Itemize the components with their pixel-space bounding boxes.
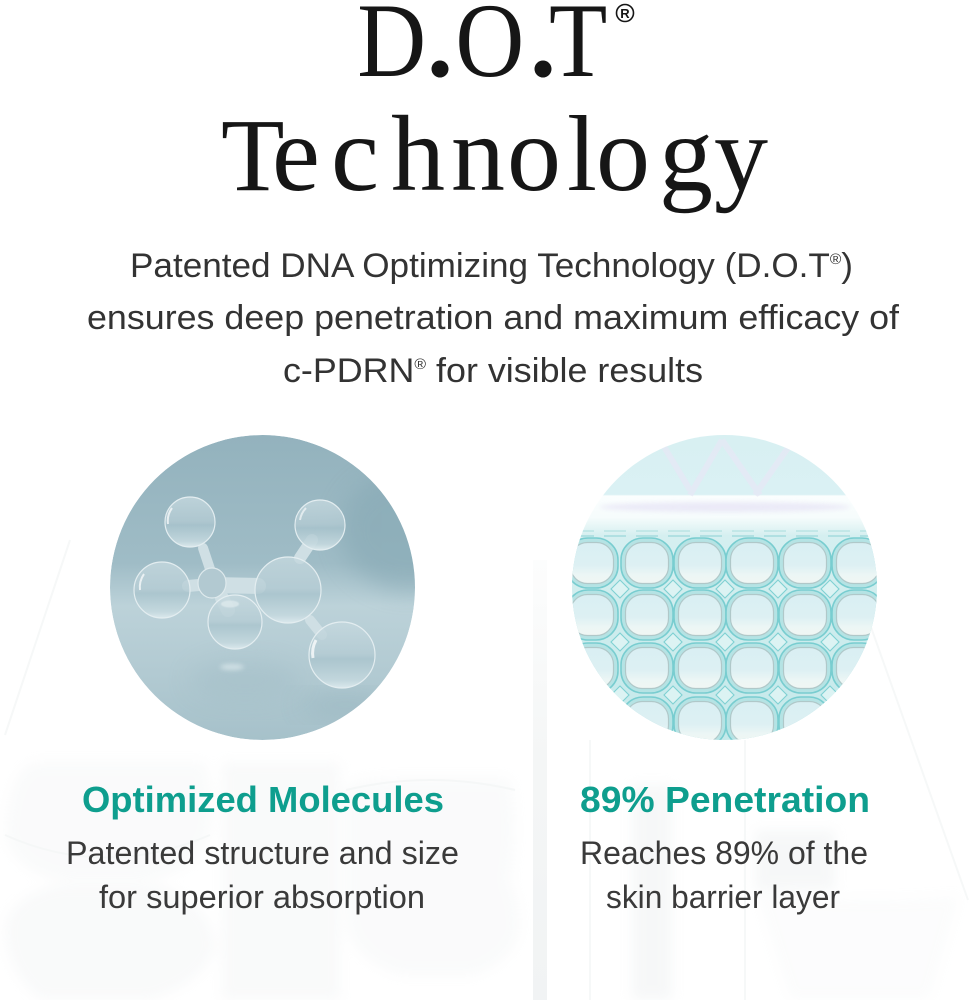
description: optimized molecules bbox=[66, 835, 459, 915]
panel: optimized molecules image bbox=[110, 435, 415, 740]
diamonds between cells bbox=[611, 580, 839, 704]
intro text block: ® bbox=[830, 251, 841, 268]
intro text block: ® bbox=[414, 356, 426, 373]
description: optimized molecules: Patented structure and size bbox=[66, 835, 459, 871]
intro text block: ensures deep penetration and maximum efficacy of bbox=[87, 299, 900, 337]
intro text block: ) bbox=[841, 247, 853, 285]
icon: registered mark: R bbox=[620, 6, 630, 21]
panel: 89% penetration image bbox=[566, 435, 884, 747]
description: optimized molecules: for superior absorption bbox=[99, 879, 425, 915]
description: 89% penetration: Reaches 89% of the bbox=[580, 835, 868, 871]
cell grid bbox=[566, 538, 884, 747]
intro text block: Patented DNA Optimizing Technology (D.O.T bbox=[130, 247, 808, 285]
title: Technology: T bbox=[221, 98, 285, 213]
intro text block: c-PDRN bbox=[283, 352, 408, 390]
heading: optimized molecules: Optimized Molecules bbox=[82, 779, 444, 820]
heading: 89% penetration: 89% Penetration bbox=[580, 779, 870, 820]
icon: glass molecule bbox=[134, 497, 375, 688]
title: Technology: echnology bbox=[272, 95, 768, 214]
faint skin surface lines bbox=[660, 440, 790, 495]
intro text block: for visible results bbox=[426, 352, 703, 390]
icon: registered mark bbox=[616, 4, 634, 22]
description: 89% penetration bbox=[580, 835, 868, 915]
intro text block bbox=[87, 247, 900, 390]
description: 89% penetration: skin barrier layer bbox=[606, 879, 840, 915]
